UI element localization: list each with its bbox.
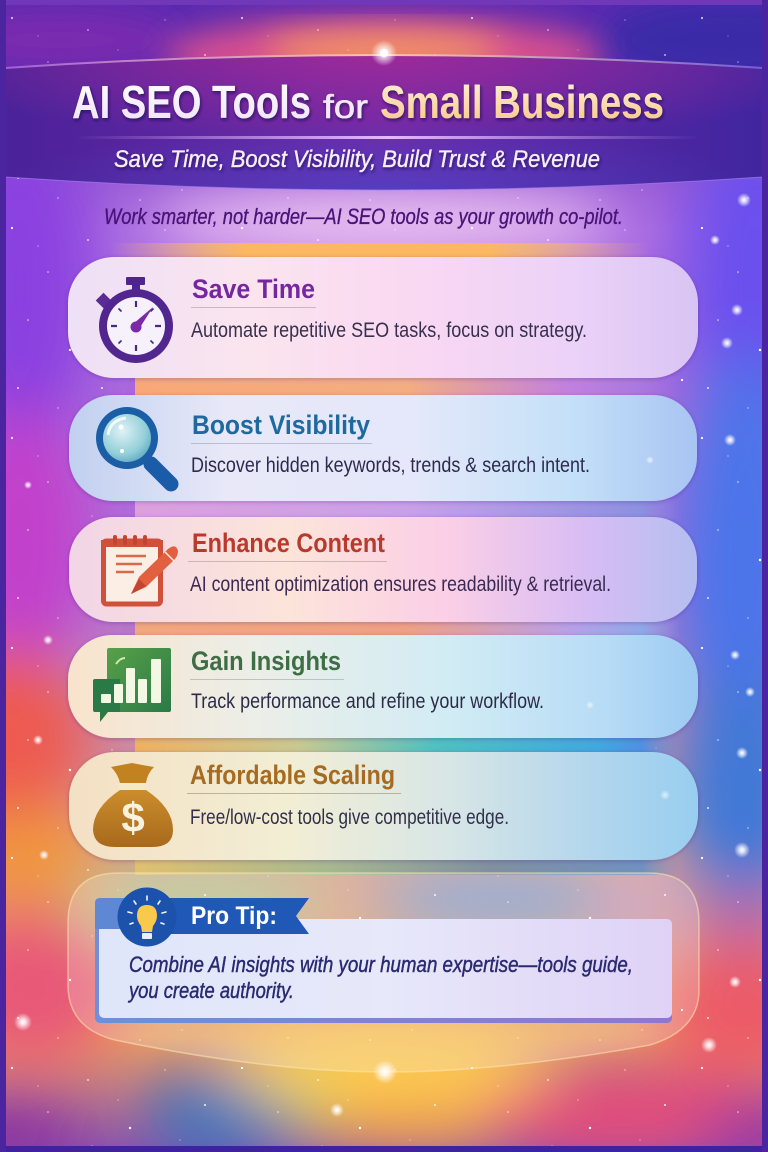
panel: save time — [68, 257, 698, 378]
title: AI SEO Tools — [72, 76, 311, 128]
icon: money bag — [93, 763, 173, 847]
tip text — [127, 952, 633, 1003]
heading: Enhance Content — [192, 528, 385, 558]
gaps between panels — [110, 243, 680, 875]
icon: notepad and pencil — [101, 537, 178, 604]
top sky with sunrise glow — [0, 0, 768, 93]
icon: bar chart speech bubble — [93, 648, 171, 722]
title — [72, 76, 664, 128]
panel: affordable scaling — [69, 752, 698, 860]
heading: Boost Visibility — [192, 410, 370, 440]
description: AI content optimization ensures readability & retrieval. — [190, 573, 611, 596]
heading: Affordable Scaling — [190, 760, 395, 790]
heading: Gain Insights — [191, 646, 341, 676]
title: Small Business — [380, 76, 664, 128]
subtitle: Save Time, Boost Visibility, Build Trust & Revenue — [114, 146, 600, 173]
description: Track performance and refine your workflow. — [191, 690, 544, 713]
description: Free/low-cost tools give competitive edge. — [190, 806, 509, 829]
label: pro tip: Pro Tip: — [191, 902, 277, 930]
panel: gain insights — [68, 635, 698, 738]
glowing stars — [14, 193, 755, 1117]
tip text: you create authority. — [127, 978, 294, 1003]
description: Automate repetitive SEO tasks, focus on strategy. — [191, 319, 587, 342]
tip box — [95, 919, 672, 1023]
tagline: Work smarter, not harder—AI SEO tools as your growth co-pilot. — [104, 204, 623, 229]
ribbon — [95, 898, 309, 934]
description: Discover hidden keywords, trends & search intent. — [191, 454, 590, 477]
icon: stopwatch — [96, 277, 173, 363]
title: for — [323, 88, 368, 125]
header banner — [5, 40, 763, 190]
icon: money bag: $ — [121, 794, 145, 841]
panel: pro tip — [68, 873, 699, 1072]
heading: Save Time — [192, 274, 315, 304]
tip text: Combine AI insights with your human expertise—tools guide, — [129, 952, 633, 977]
icon: light bulb — [118, 888, 176, 946]
icon: magnifying glass — [96, 407, 171, 484]
panel: enhance content — [69, 517, 697, 622]
panel: boost visibility — [69, 395, 697, 501]
